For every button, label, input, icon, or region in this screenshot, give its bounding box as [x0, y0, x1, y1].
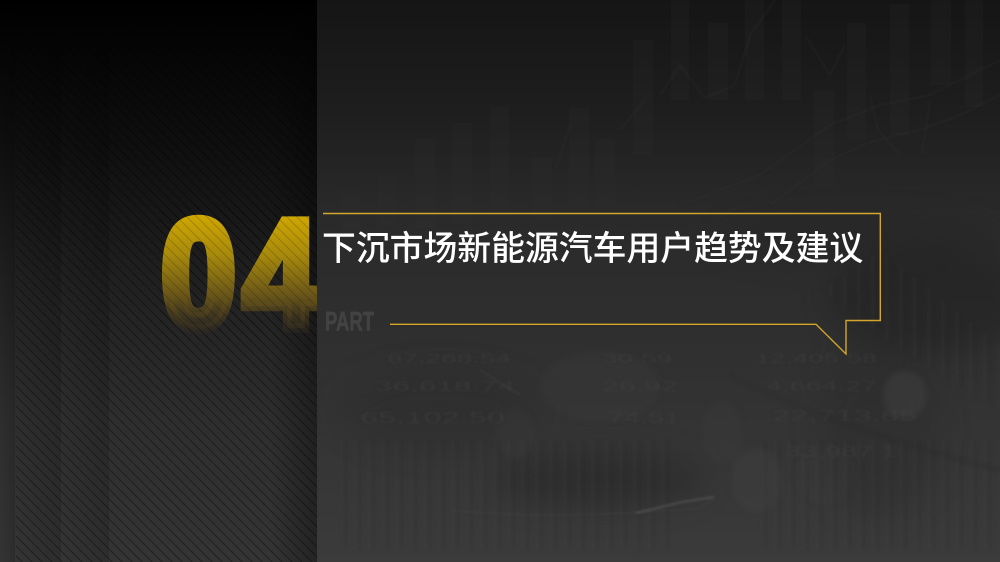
ghost financial figures: 74.51	[608, 410, 680, 427]
ghost financial figures: 4,664.27	[766, 378, 877, 395]
ghost financial figures: 22,713.85	[772, 408, 917, 425]
faint vertical coin edges	[340, 250, 1000, 550]
ghost financial figures: 26.92	[602, 378, 678, 395]
dark coin shadows	[340, 220, 1000, 520]
ghost financial figures	[360, 350, 917, 461]
bokeh circles	[496, 350, 927, 512]
hatch over number	[160, 205, 317, 340]
ghost financial figures: 36,618.74	[375, 378, 515, 395]
ghost financial figures: 12,405.58	[755, 350, 877, 366]
faint bar chart and trend lines	[317, 0, 983, 230]
ghost financial figures: 67,268.54	[387, 350, 511, 366]
panel: left striped dark panel	[0, 0, 317, 562]
ghost financial figures: 65,102.50	[360, 410, 505, 427]
ghost financial figures: 33,987.1	[785, 442, 897, 461]
title: 下沉市场新能源汽车用户趋势及建议	[322, 230, 863, 268]
coin rim highlight	[450, 370, 1000, 515]
ghost financial figures: 30.59	[602, 350, 672, 366]
